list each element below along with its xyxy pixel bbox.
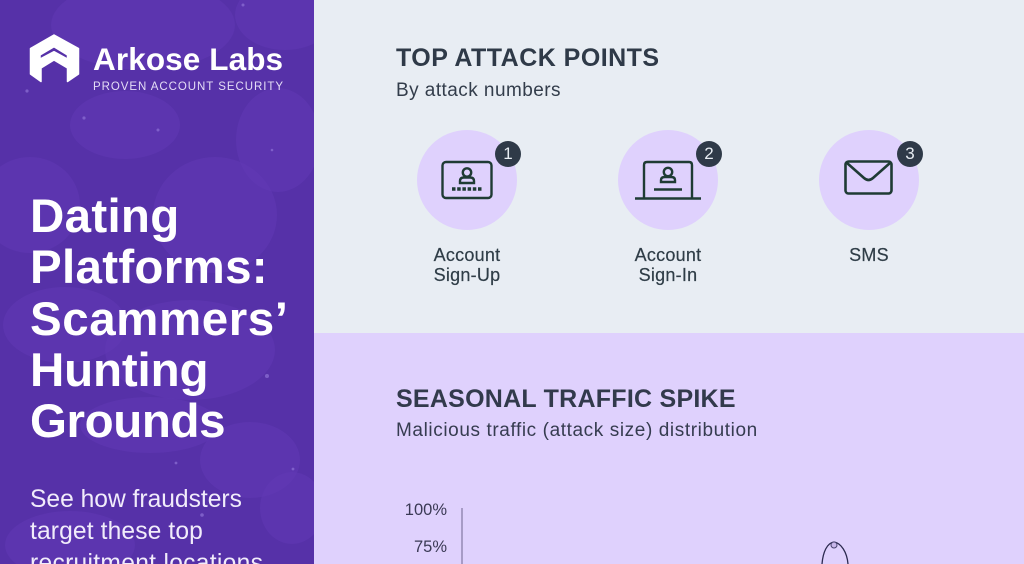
label: SMS [849, 245, 889, 265]
title: Scammers’ [30, 293, 288, 346]
panel: top attack points [314, 0, 1024, 333]
intro text [30, 486, 263, 564]
intro text: See how fraudsters [30, 486, 242, 513]
heading: TOP ATTACK POINTS [396, 44, 660, 72]
badge 3: 3 [905, 144, 915, 163]
panel: seasonal traffic spike [314, 333, 1024, 564]
title: Platforms: [30, 241, 268, 294]
badge 3 [897, 141, 923, 167]
label: Sign-Up [434, 265, 500, 285]
icon: laptop [618, 130, 718, 230]
item: account sign-up [417, 130, 521, 286]
item: sms [819, 130, 923, 265]
title [30, 190, 288, 448]
label: Account [635, 245, 701, 265]
label: Account [434, 245, 500, 265]
badge 1: 1 [503, 144, 513, 163]
logo [30, 34, 284, 93]
intro text: target these top [30, 518, 203, 545]
y axis label 100: 100% [405, 501, 447, 519]
panel: left sidebar [0, 0, 314, 564]
y axis label 75: 75% [414, 538, 447, 556]
title: Dating [30, 190, 180, 243]
heading: SEASONAL TRAFFIC SPIKE [396, 385, 736, 413]
subheading: By attack numbers [396, 80, 561, 101]
label [634, 245, 702, 286]
icon: envelope [819, 130, 919, 230]
icon: Arkose shield [30, 34, 80, 82]
chart: line peak [462, 508, 849, 564]
badge 2: 2 [704, 144, 714, 163]
item: account sign-in [618, 130, 722, 286]
label [434, 245, 500, 286]
logo wordmark: Arkose Labs [93, 41, 283, 77]
badge 1 [495, 141, 521, 167]
badge 2 [696, 141, 722, 167]
logo tagline: PROVEN ACCOUNT SECURITY [93, 81, 284, 93]
label: Sign-In [639, 265, 697, 285]
title: Hunting [30, 344, 208, 397]
icon: sign-up card [417, 130, 517, 230]
background blobs [26, 4, 297, 517]
title: Grounds [30, 395, 225, 448]
subheading: Malicious traffic (attack size) distribution [396, 420, 758, 441]
